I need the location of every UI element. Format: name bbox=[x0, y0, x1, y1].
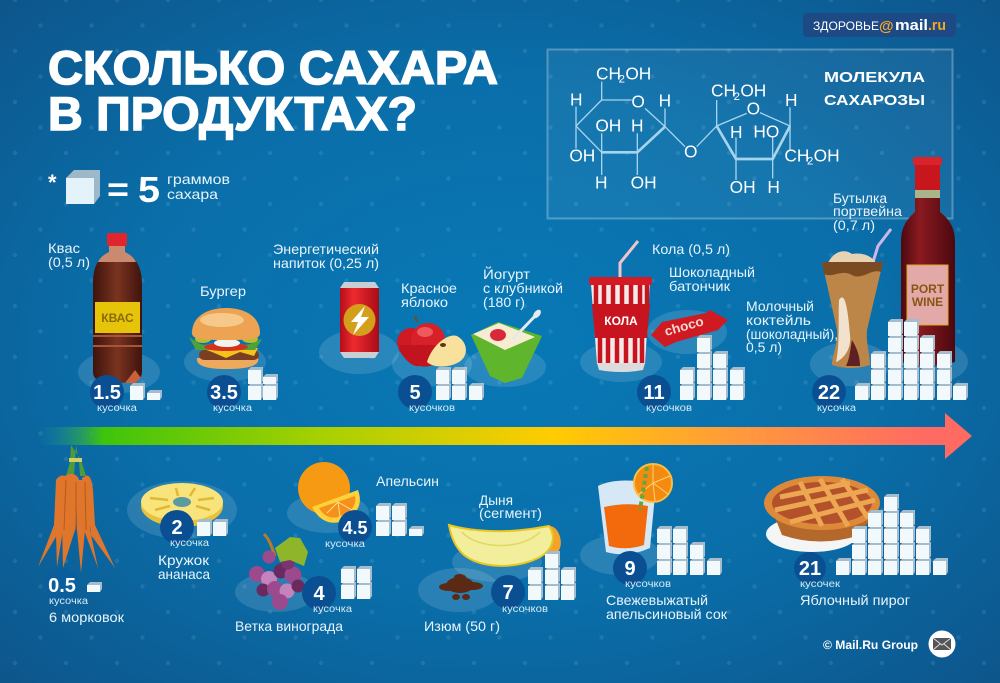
count 5 bbox=[398, 367, 484, 414]
label bbox=[479, 492, 542, 521]
label bbox=[606, 592, 728, 622]
label: Яблочный пирог bbox=[800, 592, 910, 608]
label: Ветка винограда bbox=[235, 618, 343, 634]
label: Энергетический bbox=[273, 241, 379, 257]
count 4: кусочка bbox=[313, 604, 352, 615]
molecule diagram: OH bbox=[569, 145, 595, 165]
label: Дыня bbox=[479, 492, 513, 508]
label: Кола (0,5 л) bbox=[652, 241, 730, 257]
label: Бутылка bbox=[833, 190, 887, 206]
molecule diagram: H bbox=[595, 172, 608, 192]
item: kvass bbox=[48, 233, 162, 414]
molecule diagram: 2 bbox=[807, 156, 813, 168]
count 22 bbox=[812, 319, 968, 414]
count 22: 22 bbox=[818, 382, 840, 404]
label: (сегмент) bbox=[479, 505, 542, 521]
item: port wine: WINE bbox=[912, 295, 943, 309]
count 0.5: кусочка bbox=[49, 596, 88, 607]
label bbox=[746, 298, 838, 355]
count 3.5 bbox=[207, 367, 278, 414]
molecule diagram: H bbox=[659, 91, 671, 111]
count 4: 4 bbox=[313, 583, 325, 605]
item: raisins bbox=[418, 568, 500, 634]
count 7: кусочков bbox=[502, 604, 548, 615]
legend: one cube equals 5 grams of sugar: * bbox=[48, 170, 57, 195]
count 11: 11 bbox=[643, 382, 665, 404]
count 2 bbox=[160, 510, 228, 549]
molecule diagram: 2 bbox=[619, 74, 625, 86]
label: 0,5 л) bbox=[746, 339, 782, 355]
count 5: 5 bbox=[409, 382, 421, 404]
item: apple pie bbox=[764, 476, 948, 608]
copyright: © Mail.Ru Group bbox=[823, 638, 918, 652]
label bbox=[401, 280, 457, 310]
item: cola bbox=[580, 241, 730, 382]
legend: one cube equals 5 grams of sugar: сахара bbox=[167, 186, 218, 202]
molecule diagram: H bbox=[785, 90, 798, 110]
title: СКОЛЬКО САХАРА bbox=[48, 41, 498, 94]
logo: Здоровье@mail.ru bbox=[803, 13, 956, 37]
item: chocolate bar: choco bbox=[663, 313, 705, 339]
molecule diagram: OH bbox=[730, 177, 756, 197]
label: (180 г) bbox=[483, 294, 525, 310]
item: carrots bbox=[38, 445, 125, 625]
label: коктейль bbox=[746, 312, 811, 328]
legend: one cube equals 5 grams of sugar: граммов bbox=[167, 171, 230, 187]
count 2: 2 bbox=[171, 517, 183, 539]
label bbox=[273, 241, 379, 271]
molecule diagram: OH bbox=[740, 81, 766, 101]
label: (шоколадный), bbox=[746, 326, 838, 342]
item: port wine: PORT bbox=[911, 282, 945, 296]
title bbox=[48, 41, 498, 140]
count 1.5: кусочка bbox=[97, 403, 137, 414]
count 9: кусочков bbox=[625, 579, 671, 590]
arrow: sugar scale bbox=[38, 413, 972, 459]
count 4 bbox=[302, 566, 372, 615]
label: напиток (0,25 л) bbox=[273, 255, 379, 271]
logo: Здоровье@mail.ru: ЗДОРОВЬЕ bbox=[813, 19, 879, 33]
label: Молочный bbox=[746, 298, 814, 314]
label bbox=[483, 265, 563, 310]
label bbox=[833, 190, 902, 233]
label bbox=[669, 264, 755, 294]
item: red apple bbox=[392, 280, 484, 414]
count 1.5: 1.5 bbox=[93, 382, 121, 404]
label: (0,5 л) bbox=[48, 254, 90, 270]
item: milkshake bbox=[746, 229, 968, 414]
label: 6 морковок bbox=[49, 609, 125, 625]
icon: envelope bbox=[928, 630, 956, 658]
molecule diagram: CH bbox=[596, 63, 621, 83]
label: Бургер bbox=[200, 283, 246, 299]
label bbox=[48, 240, 90, 270]
label: яблоко bbox=[401, 294, 448, 310]
molecule title bbox=[824, 69, 925, 109]
count 7 bbox=[491, 551, 576, 615]
count 4.5: 4.5 bbox=[342, 518, 368, 538]
label: портвейна bbox=[833, 203, 902, 219]
label: (0,7 л) bbox=[833, 217, 875, 233]
item: orange juice bbox=[580, 464, 728, 622]
item: melon segment bbox=[449, 492, 576, 615]
count 9 bbox=[613, 526, 722, 590]
logo: Здоровье@mail.ru: .ru bbox=[928, 17, 946, 34]
count 1.5 bbox=[90, 375, 162, 414]
count 4.5 bbox=[325, 503, 424, 550]
count 2: кусочка bbox=[170, 538, 209, 549]
count 0.5 bbox=[45, 568, 102, 607]
label: ананаса bbox=[158, 566, 210, 582]
label: Изюм (50 г) bbox=[424, 618, 500, 634]
label: Свежевыжатый bbox=[606, 592, 708, 608]
molecule diagram: OH bbox=[631, 172, 657, 192]
logo: Здоровье@mail.ru: mail bbox=[895, 17, 928, 34]
count 21: кусочек bbox=[800, 579, 841, 590]
count 0.5: 0.5 bbox=[48, 575, 76, 597]
molecule diagram: H bbox=[730, 122, 743, 142]
molecule diagram: CH bbox=[711, 81, 736, 101]
item: chocolate bar bbox=[637, 264, 755, 414]
count 3.5: кусочка bbox=[213, 403, 252, 414]
count 11: кусочков bbox=[646, 403, 692, 414]
molecule title: МОЛЕКУЛА bbox=[824, 69, 925, 86]
label: Красное bbox=[401, 280, 457, 296]
molecule diagram: H bbox=[570, 89, 583, 109]
item: pineapple ring bbox=[127, 481, 237, 582]
count 21: 21 bbox=[799, 558, 821, 580]
molecule diagram: O bbox=[631, 91, 645, 111]
label: Квас bbox=[48, 240, 80, 256]
legend: one cube equals 5 grams of sugar: 5 bbox=[138, 169, 160, 210]
label bbox=[158, 552, 210, 582]
item: kvass: КВАС bbox=[101, 311, 134, 325]
molecule diagram: OH bbox=[814, 145, 840, 165]
label: батончик bbox=[669, 278, 731, 294]
legend: one cube equals 5 grams of sugar: = bbox=[107, 171, 129, 208]
count 11 bbox=[637, 335, 745, 414]
item: strawberry yoghurt bbox=[464, 265, 563, 387]
label: апельсиновый сок bbox=[606, 606, 728, 622]
item: orange bbox=[287, 462, 439, 550]
item: grapes bbox=[235, 534, 372, 634]
item: energy drink bbox=[273, 241, 399, 374]
count 3.5: 3.5 bbox=[210, 382, 238, 404]
molecule diagram: 2 bbox=[734, 91, 740, 103]
molecule diagram bbox=[569, 63, 840, 197]
label: Шоколадный bbox=[669, 264, 755, 280]
legend: one cube equals 5 grams of sugar bbox=[48, 169, 230, 210]
item: burger bbox=[184, 283, 278, 414]
molecule diagram: H bbox=[767, 177, 780, 197]
logo: Здоровье@mail.ru: @ bbox=[879, 18, 894, 35]
molecule diagram: OH bbox=[625, 63, 651, 83]
label: Йогурт bbox=[483, 265, 531, 282]
count 9: 9 bbox=[624, 558, 636, 580]
item: port wine bbox=[833, 157, 968, 384]
count 21 bbox=[794, 494, 948, 590]
title: В ПРОДУКТАХ? bbox=[48, 87, 417, 140]
molecule diagram: O bbox=[747, 99, 760, 119]
count 5: кусочков bbox=[409, 403, 455, 414]
molecule diagram: CH bbox=[784, 145, 809, 165]
label: Апельсин bbox=[376, 473, 439, 489]
molecule diagram: O bbox=[684, 142, 697, 162]
panel: sucrose molecule bbox=[548, 50, 952, 218]
label: с клубникой bbox=[483, 280, 563, 296]
label: Кружок bbox=[158, 552, 210, 568]
count 22: кусочка bbox=[817, 403, 856, 414]
molecule title: САХАРОЗЫ bbox=[824, 92, 925, 109]
count 7: 7 bbox=[502, 582, 514, 604]
molecule diagram: H bbox=[631, 115, 644, 135]
item: cola: КОЛА bbox=[604, 314, 638, 328]
molecule diagram: OH bbox=[595, 115, 621, 135]
count 4.5: кусочка bbox=[325, 539, 365, 550]
molecule diagram: HO bbox=[753, 121, 779, 141]
